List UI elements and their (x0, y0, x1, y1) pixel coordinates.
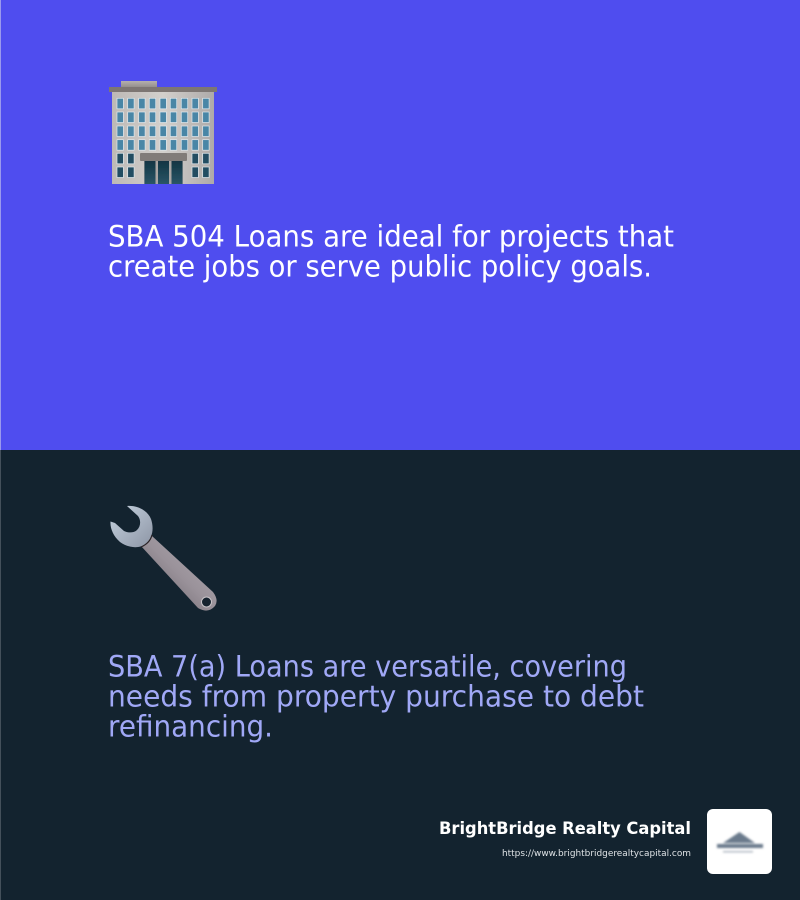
text: SBA 7(a) description: SBA 7(a) Loans are versatile, covering (108, 650, 627, 684)
footer: brand name and URL (439, 819, 691, 859)
footer: brand name and URL: https://www.brightbridgerealtycapital.com (502, 849, 691, 859)
icon: wrench (110, 506, 217, 611)
text: SBA 7(a) description: needs from property purchase to debt (108, 680, 644, 714)
panel: SBA 7(a) loans (0, 450, 800, 900)
footer: brand name and URL: BrightBridge Realty Capital (439, 819, 691, 839)
text: SBA 7(a) description: refinancing. (108, 710, 273, 744)
left edge line (0, 0, 1, 900)
logo: BrightBridge badge (707, 809, 772, 874)
text: SBA 504 description: SBA 504 Loans are ideal for projects that (108, 220, 674, 254)
icon: office building (109, 81, 217, 184)
text: SBA 504 description (108, 220, 674, 284)
entrance (144, 160, 183, 184)
text: SBA 504 description: create jobs or serve public policy goals. (108, 250, 652, 284)
text: SBA 7(a) description (108, 650, 644, 744)
windows (117, 98, 209, 150)
panel: SBA 504 loans (0, 0, 800, 450)
